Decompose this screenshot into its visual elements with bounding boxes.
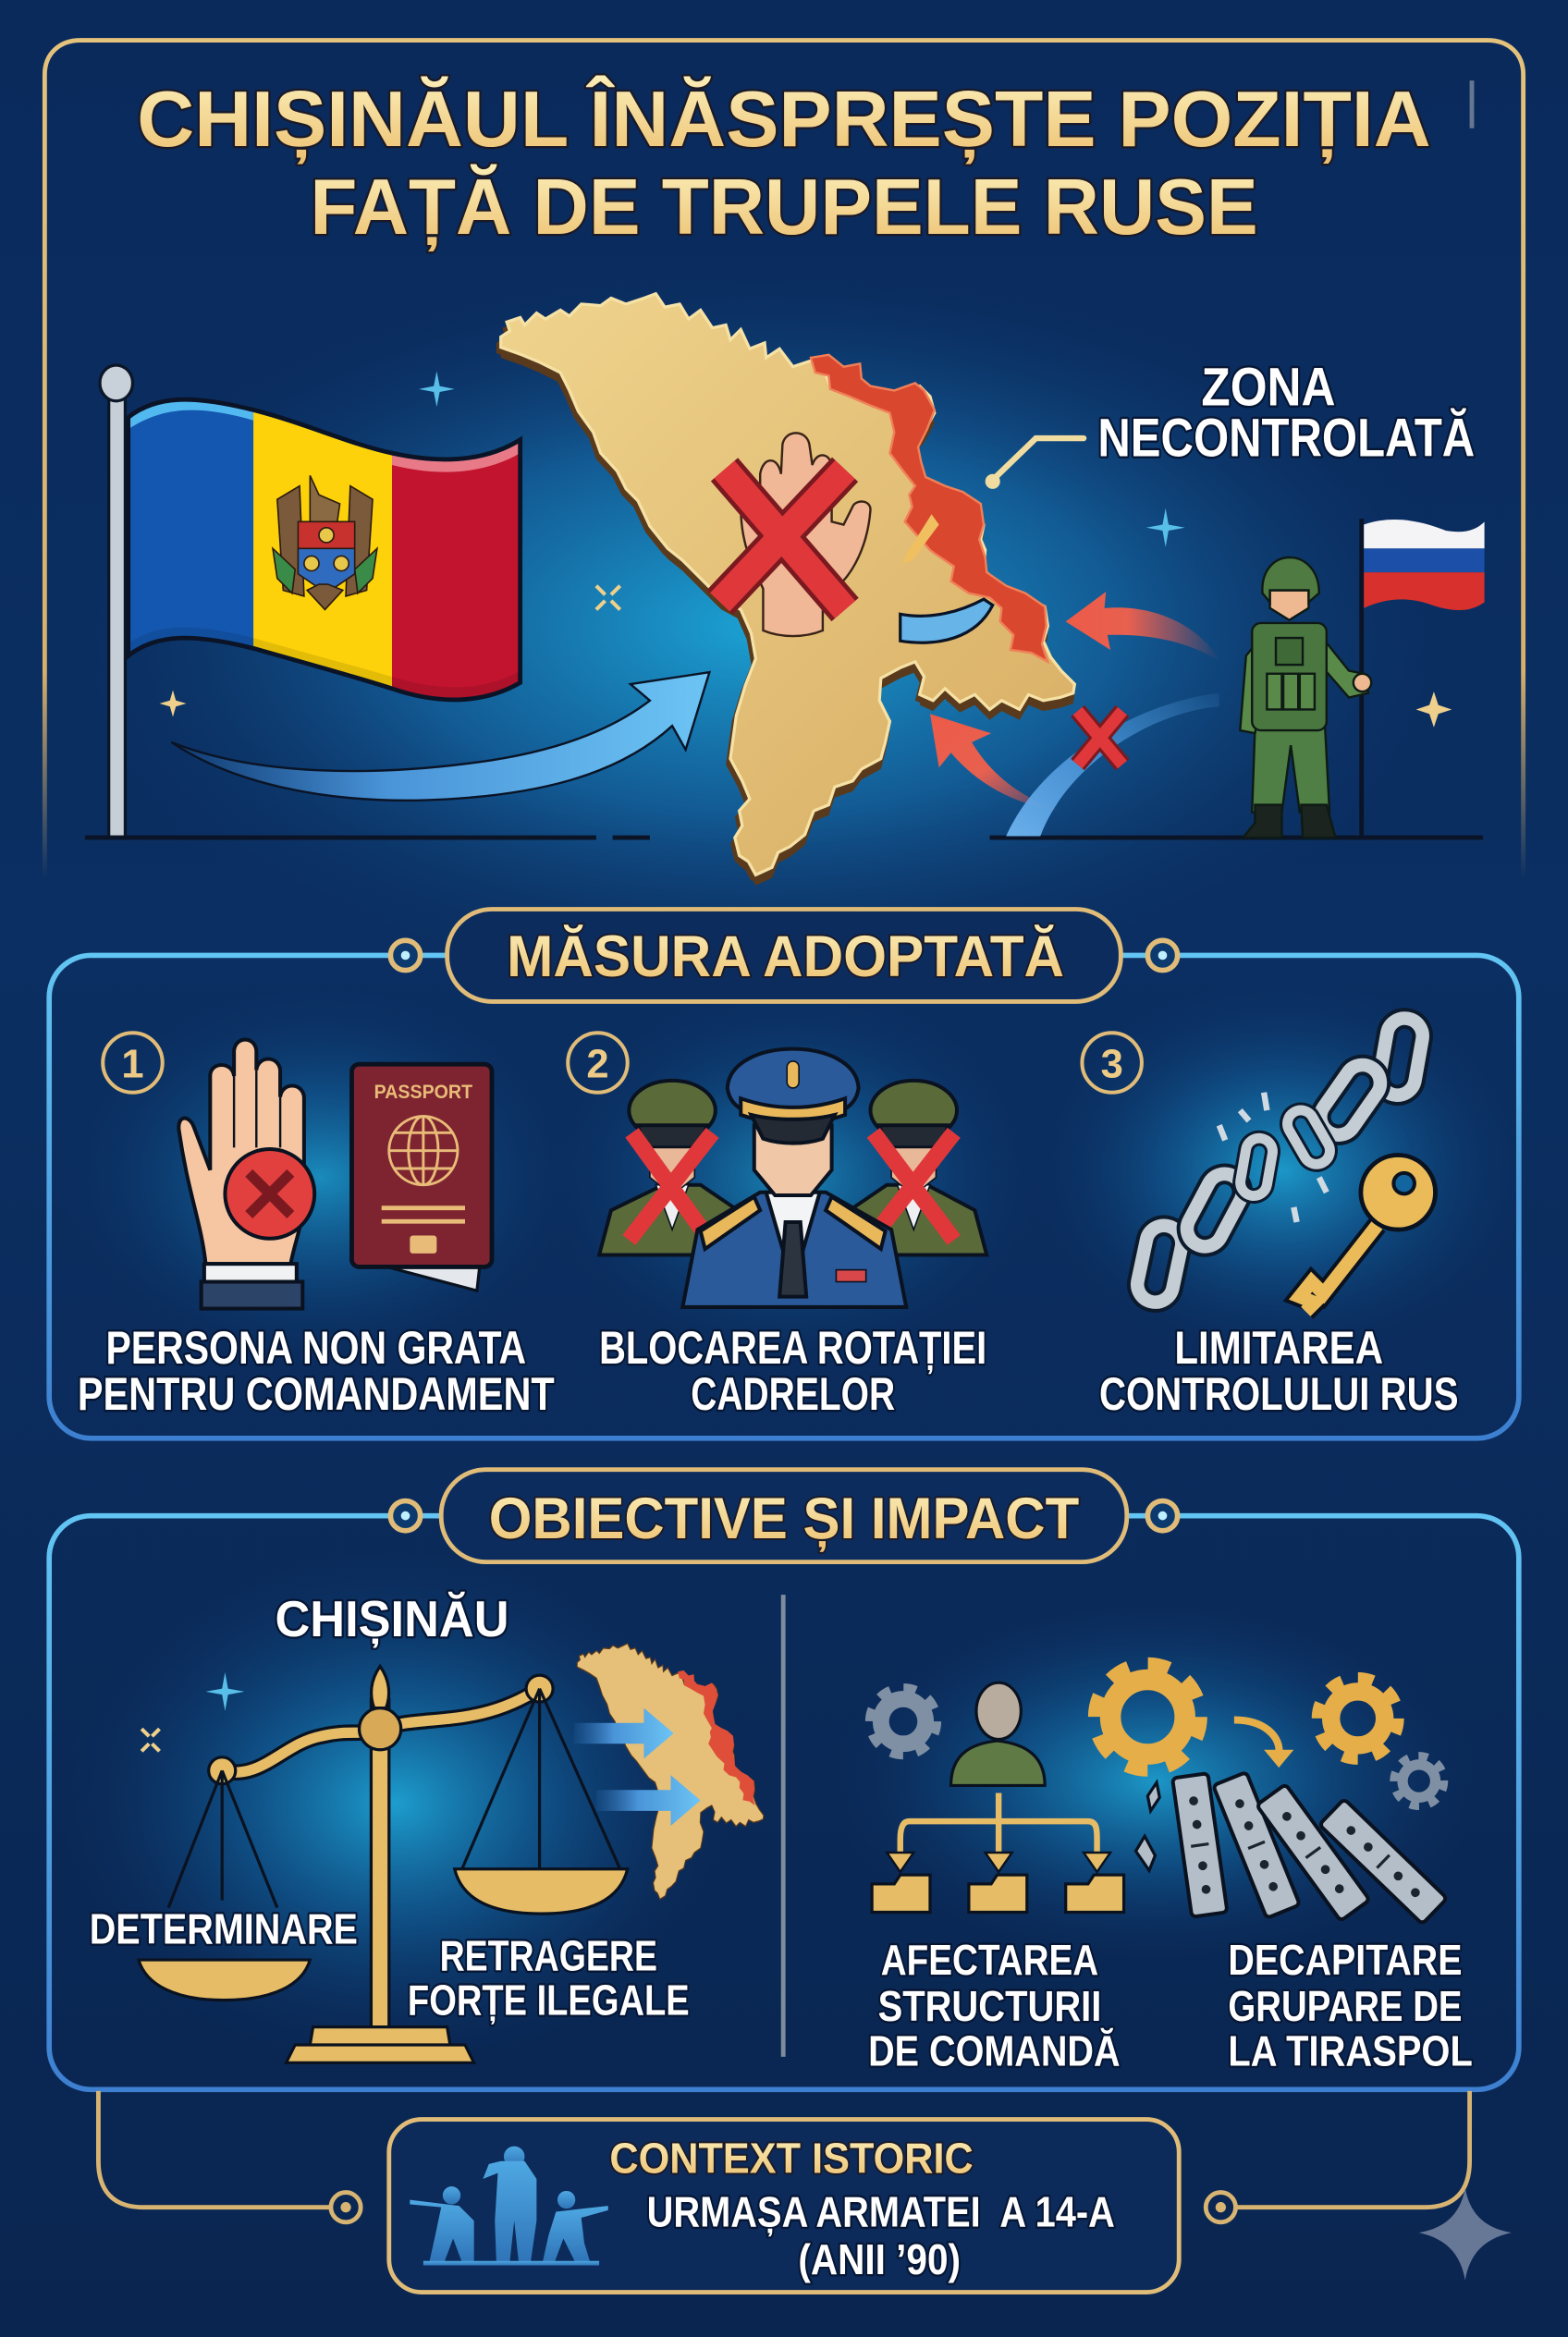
panel: masura adoptata xyxy=(49,955,1519,1438)
coat of arms xyxy=(273,475,377,609)
main officer xyxy=(682,1193,906,1307)
number badges xyxy=(103,1033,1142,1093)
icon: gold gears xyxy=(1097,1666,1443,1805)
callout leader xyxy=(986,438,1084,489)
context text: CONTEXT ISTORIC xyxy=(609,2135,974,2183)
label step 1: PENTRU COMANDAMENT xyxy=(78,1368,555,1420)
small map with arrows xyxy=(574,1644,764,1899)
sparkles impact xyxy=(141,1672,244,1751)
side officers xyxy=(599,1081,986,1255)
soldier xyxy=(1240,557,1371,838)
icon: broken chain and key xyxy=(1134,1015,1436,1312)
number badges: 3 xyxy=(1101,1043,1123,1087)
label: zona necontrolata: NECONTROLATĂ xyxy=(1097,408,1475,468)
label step 2: BLOCAREA ROTAȚIEI xyxy=(599,1322,986,1374)
label step 3: LIMITAREA xyxy=(1174,1322,1383,1374)
label step 2: CADRELOR xyxy=(691,1368,895,1420)
label step 2 xyxy=(599,1322,986,1420)
panel: context istoric xyxy=(389,2120,1179,2293)
gold sparkles xyxy=(160,586,1452,728)
org chart with folders xyxy=(872,1793,1124,1912)
label: afectarea: AFECTAREA xyxy=(881,1936,1098,1984)
pill heading: masura adoptata xyxy=(447,909,1121,1001)
blue crescent xyxy=(900,599,993,642)
label step 3 xyxy=(1099,1322,1459,1420)
Moldovan flag on pole xyxy=(100,365,526,838)
icon: commander person xyxy=(951,1682,1045,1785)
label: decapitare: GRUPARE DE xyxy=(1228,1982,1463,2030)
panel: obiective si impact xyxy=(49,1516,1519,2089)
connectors to context xyxy=(98,2091,1470,2222)
icon: grey gear left xyxy=(872,1690,935,1753)
label: decapitare: LA TIRASPOL xyxy=(1228,2027,1473,2075)
label: afectarea: DE COMANDĂ xyxy=(868,2027,1121,2075)
watermark star xyxy=(1419,2188,1512,2281)
label: decapitare: DECAPITARE xyxy=(1228,1936,1463,1984)
title: FAȚĂ DE TRUPELE RUSE xyxy=(310,164,1258,251)
red arrow upper xyxy=(1066,592,1220,662)
label: decapitare xyxy=(1228,1936,1473,2075)
context text: URMAȘA ARMATEI A 14-A xyxy=(647,2188,1115,2237)
watermark tick xyxy=(1470,80,1474,128)
number badges: 2 xyxy=(586,1043,609,1087)
context text xyxy=(609,2135,1115,2283)
hand with red X xyxy=(720,433,871,636)
label: chisinau: CHIȘINĂU xyxy=(275,1590,509,1648)
icon: falling dominoes xyxy=(1135,1772,1447,1924)
title: CHIȘINĂUL ÎNĂSPREȘTE POZIȚIA xyxy=(137,75,1431,165)
label: zona necontrolata xyxy=(1097,358,1475,468)
connector dots impact xyxy=(390,1501,1178,1531)
icon: crossed officers xyxy=(599,1049,986,1307)
label: zona necontrolata: ZONA xyxy=(1201,358,1336,418)
icon glows measure xyxy=(59,976,1536,1371)
icon: passport xyxy=(351,1064,492,1291)
icon: passport: PASSPORT xyxy=(374,1082,472,1103)
pill heading: masura adoptata: MĂSURA ADOPTATĂ xyxy=(507,924,1064,989)
scale of justice xyxy=(139,1666,628,2062)
connector dots measure xyxy=(390,940,1178,971)
red arrow lower xyxy=(930,714,1060,811)
Russian flag xyxy=(1359,519,1485,836)
label: afectarea xyxy=(868,1936,1121,2075)
glows impact xyxy=(59,1543,1483,2064)
pill heading: obiective: OBIECTIVE ȘI IMPACT xyxy=(489,1487,1079,1552)
number badges: 1 xyxy=(121,1043,144,1087)
sparkles header xyxy=(419,371,1185,547)
label: afectarea: STRUCTURII xyxy=(878,1982,1101,2030)
label step 1 xyxy=(78,1322,555,1420)
context text: (ANII ’90) xyxy=(798,2235,961,2283)
label step 1: PERSONA NON GRATA xyxy=(105,1322,526,1374)
label step 3: CONTROLULUI RUS xyxy=(1099,1368,1459,1420)
uncontrolled zone xyxy=(811,355,1047,662)
label: retragere xyxy=(408,1931,690,2025)
pill heading: obiective xyxy=(441,1470,1127,1562)
label: retragere: FORȚE ILEGALE xyxy=(408,1976,690,2025)
icon: stop hand xyxy=(178,1040,314,1309)
label: retragere: RETRAGERE xyxy=(440,1931,657,1979)
icon: soldiers silhouette xyxy=(410,2147,608,2266)
title xyxy=(137,75,1431,251)
step labels xyxy=(78,1322,555,1420)
map of Moldova xyxy=(496,294,1074,886)
label: determinare: DETERMINARE xyxy=(90,1904,358,1952)
red X marks xyxy=(629,1132,954,1240)
divider xyxy=(781,1595,786,2057)
blue arrow towards map xyxy=(171,672,709,801)
blue blocked arc with X xyxy=(1006,693,1219,836)
ground lines xyxy=(85,837,1483,839)
top frame xyxy=(44,41,1524,879)
